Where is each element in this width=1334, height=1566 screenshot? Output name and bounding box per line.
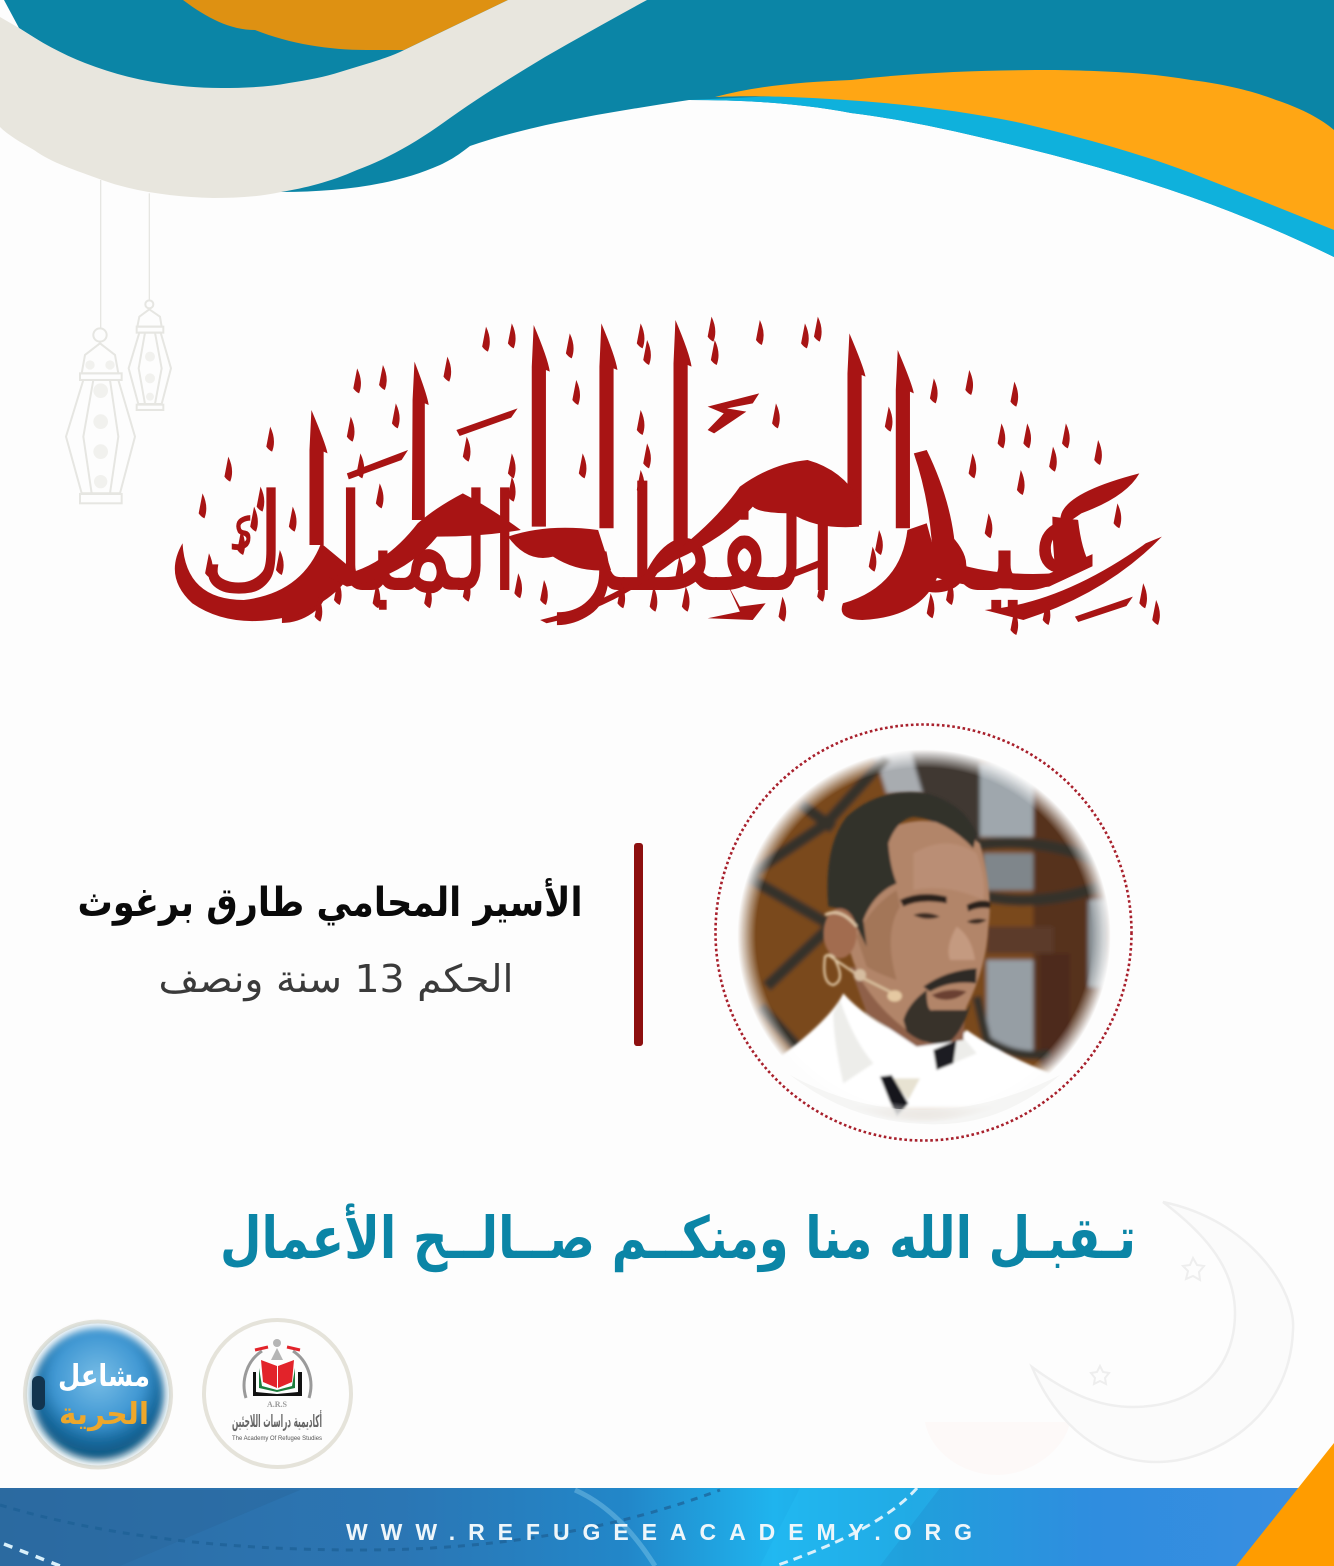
shirt — [782, 992, 1048, 1118]
word: eid: عيد — [914, 465, 1106, 622]
face — [846, 821, 990, 1043]
ear — [823, 908, 857, 958]
header wave shapes — [0, 0, 1334, 257]
prisoner name: الأسير المحامي طارق برغوث — [78, 877, 582, 926]
calligraphy title — [175, 317, 1162, 635]
portrait photo — [738, 750, 1110, 1120]
sentence line: الحكم 13 سنة ونصف — [158, 957, 514, 1002]
footer band — [0, 1488, 1334, 1566]
word: al-mubarak: المبارك — [201, 465, 519, 623]
divider bar — [634, 843, 643, 1046]
beard — [903, 990, 971, 1044]
logo: academy of refugee studies: The Academy Of Refugee Studies — [232, 1436, 322, 1442]
logo: torches of freedom: الحرية — [59, 1397, 149, 1432]
logo: torches of freedom — [25, 1322, 171, 1468]
orange corner — [1236, 1443, 1334, 1566]
logo: torches of freedom: مشاعل — [58, 1359, 150, 1394]
lantern: small — [129, 193, 171, 410]
neck — [850, 967, 967, 1047]
lantern: large — [66, 180, 135, 503]
dotted ring — [716, 724, 1132, 1140]
ornamental calligraphic marks — [175, 317, 1162, 635]
microphone — [824, 955, 897, 995]
orange ribbon — [715, 70, 1334, 230]
greeting line: تـقبـل الله منا ومنكــم صــالــح الأعمال — [220, 1203, 1136, 1273]
website address: WWW.REFUGEEACADEMY.ORG — [346, 1519, 972, 1545]
word: al-fitr: الفطر — [556, 457, 838, 626]
teal wave — [4, 0, 1334, 257]
crescent decoration — [925, 1202, 1293, 1475]
cyan ribbon — [689, 95, 1334, 257]
logo: academy of refugee studies: أكاديمية دراسات اللاجئين — [232, 1410, 322, 1432]
photo bottom edge — [790, 1075, 1060, 1124]
lanterns decoration — [66, 180, 171, 503]
logo: academy of refugee studies: A.R.S — [267, 1400, 288, 1409]
hair — [827, 792, 977, 947]
cream wave — [0, 0, 647, 198]
logo: academy of refugee studies — [204, 1320, 351, 1467]
portrait: photo in dotted ring — [716, 724, 1132, 1153]
brows and eyes — [900, 894, 990, 912]
dark orange shape — [183, 0, 508, 50]
